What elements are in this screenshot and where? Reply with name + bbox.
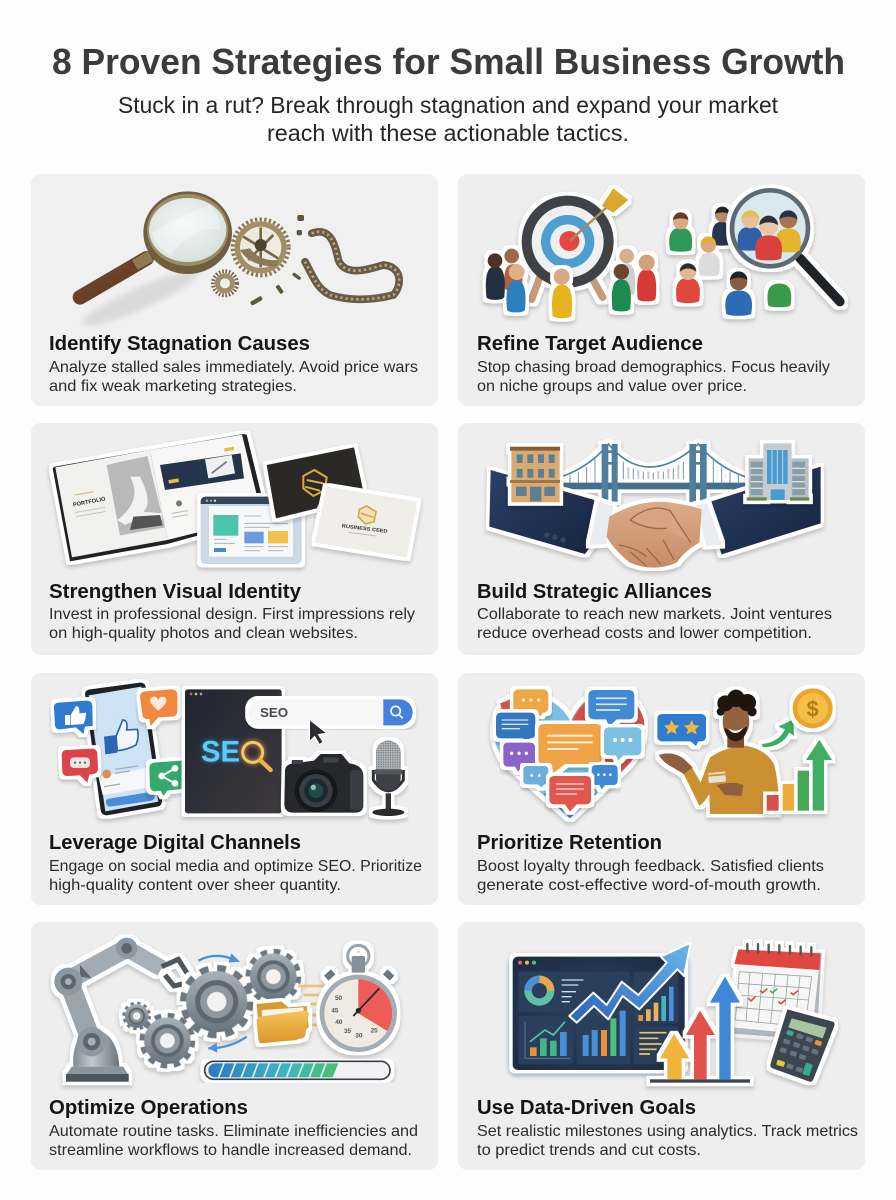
- blue bubble: [588, 690, 634, 727]
- icon: small brass gear: [213, 271, 237, 295]
- left group of wooden figures: [486, 249, 572, 318]
- icon: stopwatch: 30: [355, 1033, 363, 1040]
- illustration: target and audience figures: [486, 188, 840, 318]
- icon: microphone: [372, 741, 404, 816]
- illustration: dashboard, arrows, calendar and calculator: [508, 943, 835, 1083]
- icon: green curved growth arrow: [762, 719, 794, 747]
- icon: open portfolio book: PORTFOLIO: [73, 496, 107, 509]
- icon: large brass gear: [233, 219, 289, 275]
- icon: left small office building: [510, 447, 560, 502]
- icon: dollar coin: [793, 688, 833, 728]
- icon: mouse cursor: [309, 719, 327, 745]
- icon: orange heart bubble: [140, 689, 177, 726]
- icon: blue cycle arrows: [198, 953, 247, 1053]
- icon: three rising arrows on a baseline: [650, 977, 750, 1083]
- description: Automate routine tasks. Eliminate inefficiencies and: [49, 1123, 418, 1140]
- icon: smiling customer: [659, 690, 778, 814]
- blue dashboard glow: [508, 955, 688, 1075]
- icon: magnifying glass: [80, 191, 232, 297]
- small light blue bubble: [523, 766, 548, 787]
- description: Boost loyalty through feedback. Satisfied clients: [477, 858, 824, 875]
- light blue bubble: [604, 727, 641, 761]
- icon: stopwatch: 50: [335, 995, 343, 1002]
- icon: camera: [284, 754, 363, 813]
- icon: stopwatch: 40: [335, 1019, 343, 1026]
- description: [49, 359, 418, 395]
- illustration: handshake, bridge and buildings: [489, 443, 821, 568]
- description: high-quality content over sheer quantity.: [49, 877, 341, 894]
- icon: white business card: [315, 487, 417, 557]
- icon: green share bubble: [149, 761, 187, 796]
- title: 8 Proven Strategies for Small Business Growth: [52, 41, 845, 82]
- red bubble: [549, 776, 591, 812]
- icon: suspension bridge: [560, 444, 747, 503]
- description: and fix weak marketing strategies.: [49, 378, 297, 395]
- panel: optimize operations: [31, 922, 438, 1170]
- description: generate cost-effective word-of-mouth growth.: [477, 877, 821, 894]
- icon: website window: [201, 497, 302, 564]
- heading: Refine Target Audience: [477, 332, 703, 355]
- icon: target with arrow: [522, 188, 628, 299]
- heading: Use Data-Driven Goals: [477, 1096, 696, 1119]
- purple bubble: [503, 743, 535, 772]
- dark blue bubble: [496, 713, 535, 742]
- heading: Build Strategic Alliances: [477, 580, 712, 603]
- description: Analyze stalled sales immediately. Avoid price wars: [49, 359, 418, 376]
- icon: black business card: [267, 447, 363, 518]
- big orange bubble: [538, 724, 602, 773]
- icon: stopwatch: 35: [344, 1028, 352, 1035]
- icon: left suit sleeve: [489, 470, 600, 554]
- icon: clasped hands: [589, 502, 722, 568]
- icon: growth bar chart: [767, 740, 832, 811]
- icon: search bar: SEO: [260, 705, 288, 720]
- description: [477, 858, 824, 894]
- description: [49, 1123, 418, 1159]
- icon: robot arm: [54, 938, 189, 1082]
- icon: gear cluster: [124, 952, 298, 1065]
- description: Stop chasing broad demographics. Focus heavily: [477, 359, 830, 376]
- icon: white business card: RUSINESS CEED: [341, 523, 388, 535]
- illustration: robot arm, gears, folder, stopwatch, progress bar: [54, 938, 397, 1082]
- icon: search bar: [249, 699, 413, 725]
- heart shape: [494, 691, 644, 818]
- icon: star rating bubble: [657, 714, 706, 746]
- icon: right glass office building: [747, 443, 809, 501]
- icon: folder: [257, 1002, 309, 1043]
- icon: dark SEO window: SE: [201, 735, 240, 768]
- description: [49, 858, 422, 894]
- panel: prioritize retention: [458, 673, 865, 905]
- heading: Identify Stagnation Causes: [49, 332, 310, 355]
- icon: calendar: [732, 944, 822, 1040]
- icon: dark SEO window: SE: [201, 735, 240, 768]
- description: [477, 606, 832, 642]
- illustration: phone, SEO window, camera and microphone: [54, 683, 413, 816]
- heading: Strengthen Visual Identity: [49, 580, 302, 603]
- icon: smartphone with social feed: [85, 683, 162, 815]
- orange bubble: [513, 689, 548, 716]
- subtitle: reach with these actionable tactics.: [267, 120, 629, 146]
- description: reduce overhead costs and lower competition.: [477, 625, 812, 642]
- icon: blue like bubble: [54, 701, 93, 734]
- description: [477, 359, 830, 395]
- description: streamline workflows to handle increased demand.: [49, 1142, 412, 1159]
- description: on high-quality photos and clean websites.: [49, 625, 358, 642]
- icon: stopwatch: 45: [331, 1007, 339, 1014]
- description: Engage on social media and optimize SEO. Prioritize: [49, 858, 422, 875]
- panel: leverage digital channels: [31, 673, 438, 905]
- description: Collaborate to reach new markets. Joint ventures: [477, 606, 832, 623]
- speed lines: [298, 986, 323, 1025]
- description: to predict trends and cut costs.: [477, 1142, 701, 1159]
- panel: refine target audience: [458, 174, 865, 406]
- heading: Prioritize Retention: [477, 831, 662, 854]
- heading: Leverage Digital Channels: [49, 831, 301, 854]
- icon: dark SEO window: [185, 689, 282, 813]
- scattered audience figures: [669, 207, 791, 316]
- illustration: heart of feedback and happy customer: [494, 688, 833, 818]
- icon: right suit sleeve: [705, 467, 821, 554]
- description: [477, 1123, 858, 1159]
- description: Set realistic milestones using analytics. Track metrics: [477, 1123, 858, 1140]
- icon: heart of speech bubbles: [494, 689, 644, 818]
- subtitle: Stuck in a rut? Break through stagnation and expand your market: [118, 92, 778, 118]
- icon: calculator: [770, 1009, 835, 1082]
- icon: analytics dashboard: [513, 957, 685, 1070]
- panel: strengthen visual identity: [31, 423, 438, 655]
- panel: build strategic alliances: [458, 423, 865, 655]
- right group of wooden figures: [612, 249, 656, 311]
- icon: stopwatch: [320, 945, 397, 1052]
- description: Invest in professional design. First impressions rely: [49, 606, 415, 623]
- illustration: portfolio, website and business cards: [53, 434, 417, 564]
- icon: broken chain: [305, 232, 399, 299]
- small blue bubble: [592, 765, 618, 789]
- icon: rising zigzag arrow: [569, 943, 691, 1023]
- panel: identify stagnation causes: [31, 174, 438, 406]
- icon: stopwatch: 25: [371, 1028, 378, 1035]
- icon: progress bar: [205, 1061, 390, 1079]
- broken chain links: [250, 215, 304, 306]
- icon: magnifier over selected group: [732, 190, 840, 302]
- panel: use data-driven goals: [458, 922, 865, 1170]
- icon: open portfolio book: [53, 434, 263, 561]
- icon: dollar coin: $: [807, 697, 819, 722]
- heading: Optimize Operations: [49, 1096, 248, 1119]
- subtitle: [118, 92, 778, 146]
- description: [49, 606, 415, 642]
- icon: red comment bubble: [62, 749, 98, 783]
- illustration: magnifier, broken gears and chain: [78, 191, 399, 334]
- description: on niche groups and value over price.: [477, 378, 747, 395]
